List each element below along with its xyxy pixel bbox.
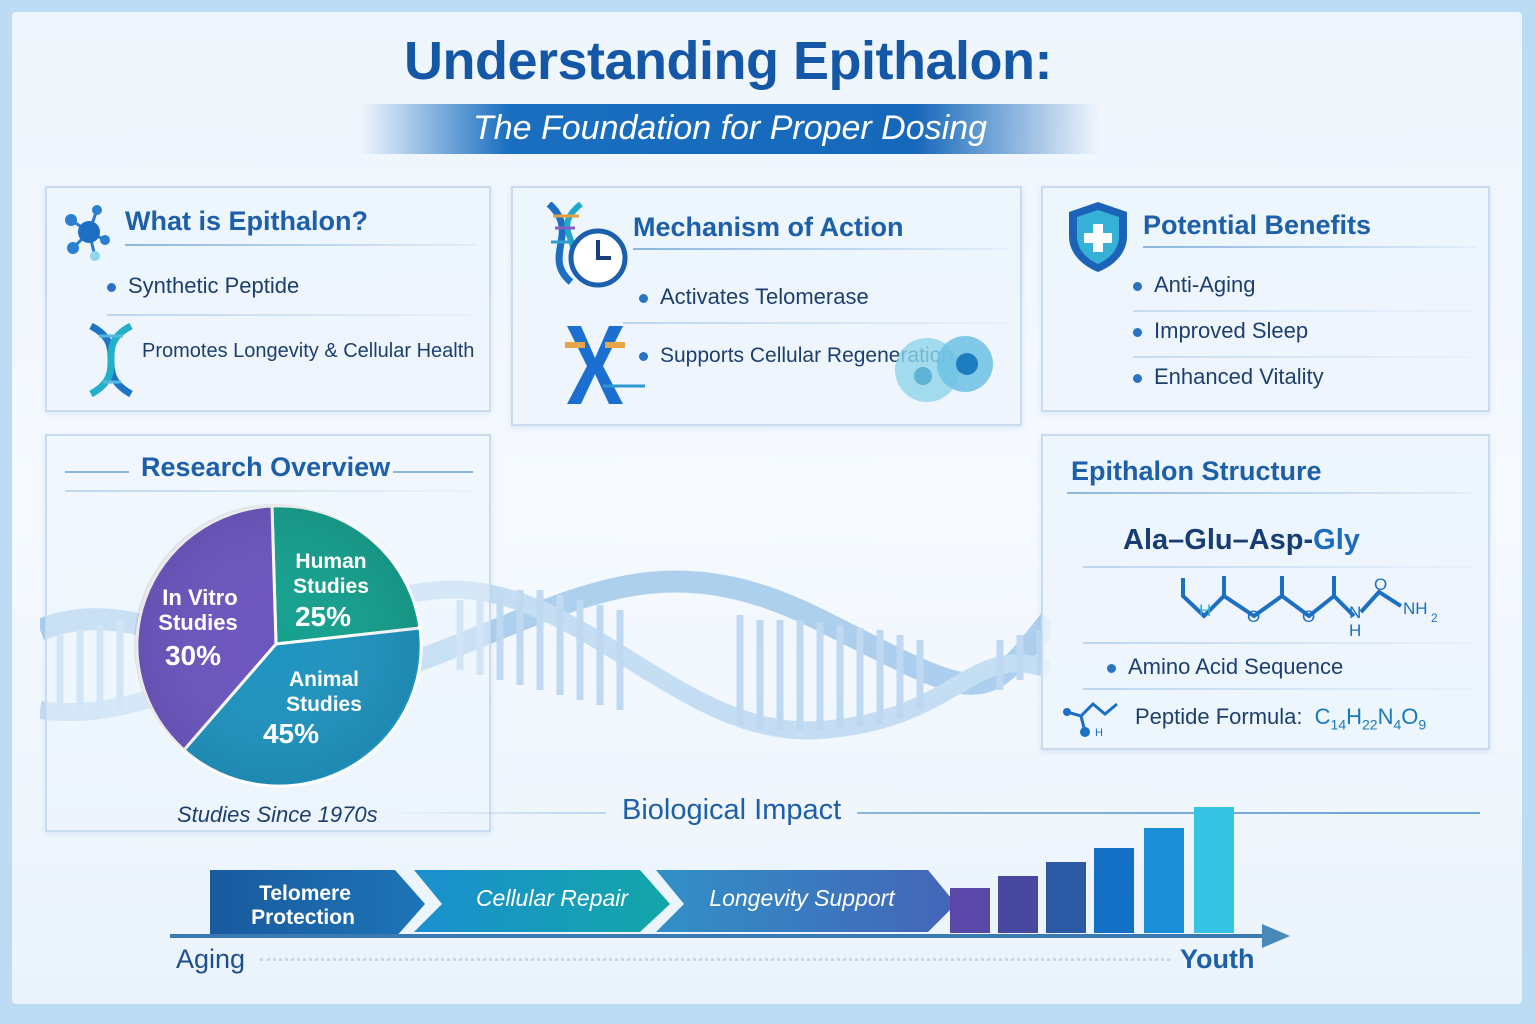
chevron: telomere protection: Telomere bbox=[259, 882, 351, 905]
chemical structure: H bbox=[1199, 601, 1211, 620]
bullet list bbox=[1133, 272, 1434, 389]
icon: small molecule: H bbox=[1095, 727, 1103, 739]
icon: dna bbox=[89, 322, 133, 398]
DNA helix background bbox=[40, 570, 1050, 740]
icon: chromosome bbox=[565, 326, 645, 404]
panel: potential benefits bbox=[1041, 186, 1490, 412]
icon: molecule bbox=[65, 205, 110, 261]
panel: epithalon structure bbox=[1041, 434, 1490, 750]
chevron: telomere protection bbox=[210, 870, 425, 938]
pie chart: 30% bbox=[165, 640, 221, 671]
bullet list: Enhanced Vitality bbox=[1154, 364, 1324, 389]
bullet: activates telomerase: Activates Telomerase bbox=[660, 284, 869, 309]
chemical structure: O bbox=[1374, 575, 1387, 594]
sequence: Ala–Glu–Asp-Gly bbox=[1123, 524, 1360, 556]
bullet: supports regeneration: Supports Cellular Regeneration bbox=[660, 344, 953, 367]
panel: what is epithalon bbox=[45, 186, 491, 412]
bullet list: Improved Sleep bbox=[1154, 318, 1308, 343]
chemical structure: NH bbox=[1403, 599, 1428, 618]
pie chart: 25% bbox=[295, 601, 351, 632]
heading: Mechanism of Action bbox=[633, 212, 904, 242]
pie chart: Human bbox=[295, 550, 367, 573]
heading: Potential Benefits bbox=[1143, 210, 1371, 240]
chemical structure bbox=[1181, 575, 1438, 636]
chemical structure: O bbox=[1247, 607, 1260, 626]
panel: mechanism of action bbox=[511, 186, 1022, 426]
bullet: synthetic peptide: Synthetic Peptide bbox=[128, 273, 299, 298]
chevron: cellular repair: Cellular Repair bbox=[476, 885, 629, 911]
label: youth: Youth bbox=[1180, 944, 1254, 974]
pie chart bbox=[134, 504, 423, 788]
icon: cells bbox=[895, 336, 993, 402]
panel: research overview bbox=[45, 434, 491, 832]
text: promotes longevity: Promotes Longevity & Cellular Health bbox=[142, 340, 474, 362]
pie chart: 45% bbox=[263, 718, 319, 749]
icon: dna clock bbox=[546, 202, 628, 288]
text: peptide formula: Peptide Formula: C14H22N4O9 bbox=[1135, 704, 1426, 732]
pie chart: Animal bbox=[289, 668, 359, 691]
slice: animal 45% bbox=[184, 628, 421, 786]
subtitle banner bbox=[360, 104, 1100, 154]
chevron: cellular repair bbox=[414, 870, 670, 932]
heading: What is Epithalon? bbox=[125, 206, 368, 236]
bullet list: Anti-Aging bbox=[1154, 272, 1256, 297]
chemical structure: N bbox=[1349, 603, 1361, 622]
subtitle banner: The Foundation for Proper Dosing bbox=[473, 109, 987, 147]
label: aging: Aging bbox=[176, 944, 245, 974]
bullet: amino acid sequence: Amino Acid Sequence bbox=[1128, 654, 1343, 679]
chevron: longevity support: Longevity Support bbox=[709, 885, 896, 911]
chemical structure: 2 bbox=[1431, 611, 1438, 625]
chemical structure: O bbox=[1302, 607, 1315, 626]
pie chart: Studies bbox=[293, 575, 369, 598]
pie chart: In Vitro bbox=[162, 585, 238, 610]
heading: Epithalon Structure bbox=[1071, 456, 1322, 486]
chevron: telomere protection: Protection bbox=[251, 906, 355, 929]
icon: shield bbox=[1069, 202, 1127, 272]
pie chart: Studies bbox=[286, 693, 362, 716]
arrow bbox=[170, 924, 1290, 948]
chevron flow bbox=[170, 807, 1290, 948]
text: studies since: Studies Since 1970s bbox=[177, 802, 378, 827]
icon: small molecule bbox=[1063, 702, 1118, 739]
bar chart bbox=[950, 807, 1234, 933]
slice: human 25% bbox=[272, 506, 420, 644]
text: Biological Impact bbox=[622, 794, 841, 826]
chevron: longevity support bbox=[656, 870, 956, 932]
slice: in vitro 30% bbox=[137, 506, 276, 750]
pie chart: Studies bbox=[158, 610, 238, 635]
title: Understanding Epithalon: bbox=[404, 31, 1052, 91]
heading: Research Overview bbox=[141, 452, 390, 482]
heading: biological impact bbox=[380, 812, 1480, 814]
